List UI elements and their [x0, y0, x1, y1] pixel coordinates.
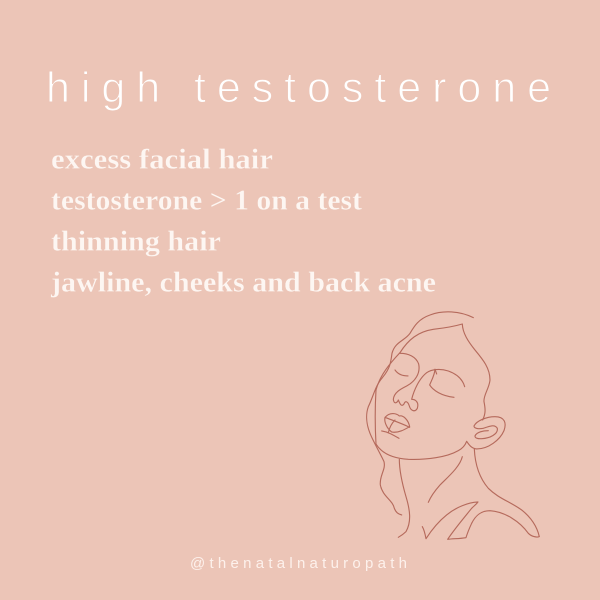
- neck tendon: [428, 457, 462, 502]
- face contour and jaw: [375, 353, 505, 459]
- near closed eye: [430, 369, 454, 397]
- chin crease: [382, 431, 399, 438]
- far eyelid: [395, 370, 408, 376]
- illustration: line-art face: [367, 312, 539, 539]
- symptom: acne: jawline, cheeks and back acne: [50, 268, 436, 298]
- outer hair strand: [367, 312, 473, 515]
- symptom list: [50, 144, 436, 298]
- hairline and forehead to neck: [400, 324, 490, 420]
- handle: @thenatalnaturopath: [190, 555, 407, 572]
- symptom: thinning hair: thinning hair: [51, 226, 221, 258]
- symptom: testosterone on a test: testosterone > 1 on a test: [51, 186, 363, 216]
- neck left: [398, 459, 410, 537]
- neck right to shoulder: [422, 449, 539, 539]
- lips: [385, 414, 410, 433]
- closed eye, far side: [393, 353, 465, 411]
- symptom: excess facial hair: excess facial hair: [51, 144, 273, 176]
- title: high testosterone: [46, 64, 551, 112]
